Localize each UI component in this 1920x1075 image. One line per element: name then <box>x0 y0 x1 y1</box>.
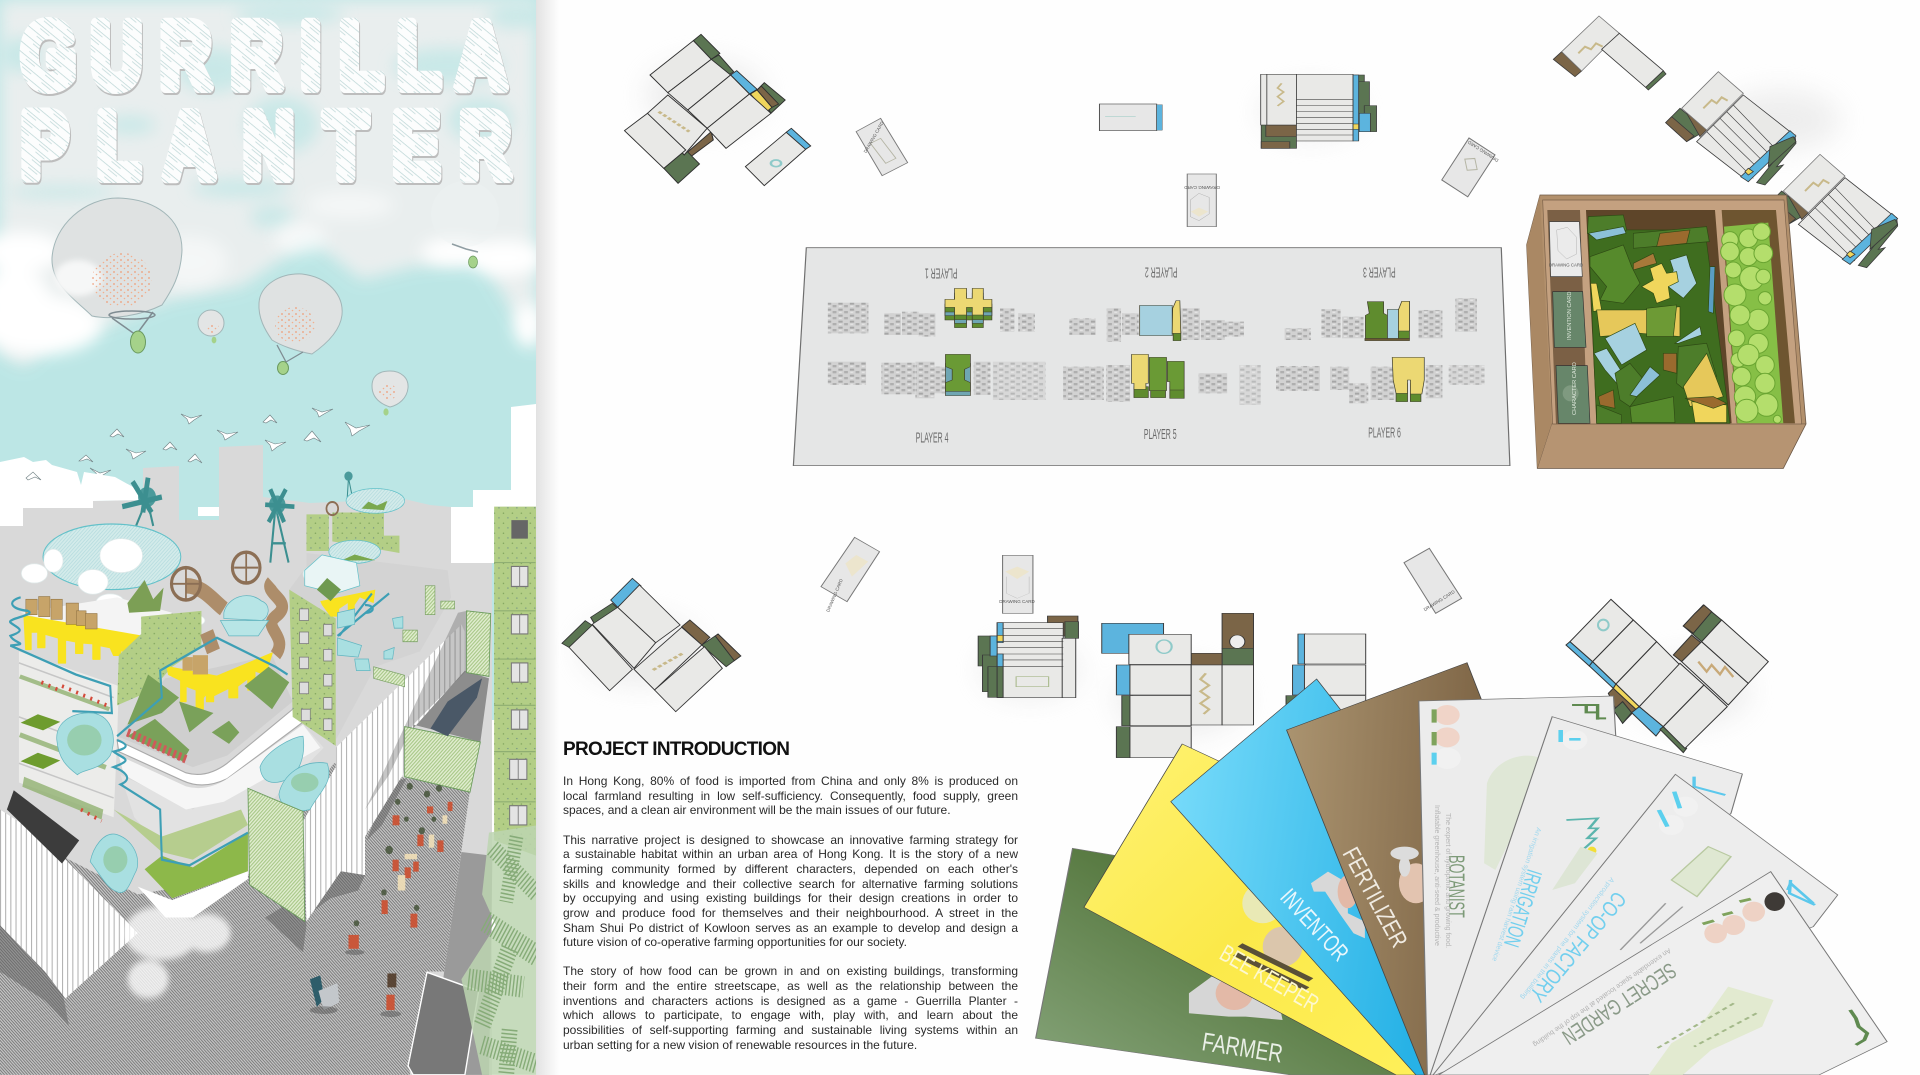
vertical card <box>1404 548 1462 613</box>
card: vertical bottom-left <box>821 537 880 602</box>
street ground <box>0 763 470 1075</box>
cards: bottom-left group <box>562 578 741 712</box>
small labels on drawing cards: DRAWING CARD <box>825 577 844 613</box>
player piece 1 <box>945 288 992 328</box>
back cluster of buildings <box>306 512 455 688</box>
box shell <box>1527 195 1806 468</box>
card titles: BOTANIST <box>1444 855 1469 918</box>
card: botanist <box>1419 696 1616 1075</box>
tabs <box>562 578 741 667</box>
heading: PROJECT INTRODUCTION <box>563 739 789 760</box>
storage box <box>1527 195 1806 468</box>
card titles: FERTILIZER <box>1337 842 1413 952</box>
coins <box>1721 223 1783 423</box>
boxed cards: DRAWING CARD <box>1549 263 1583 268</box>
paragraph three: possibilities of self-supporting farming and sustainable living systems within an <box>563 1023 1018 1037</box>
small labels on drawing cards: DRAWING CARD <box>1423 589 1456 612</box>
fan of character cards <box>1036 663 1887 1075</box>
board labels: PLAYER 3 <box>1363 264 1396 279</box>
card: farmer <box>1036 848 1422 1075</box>
clouds <box>0 0 544 367</box>
paragraph two: farming community formed by different characters, depended on each other's <box>563 862 1018 876</box>
paragraph three: their form and the entire streetscape, as well as the relationship between the <box>563 979 1018 993</box>
green mesh screens <box>248 611 491 921</box>
small labels on drawing cards <box>825 120 1499 613</box>
paragraph three: which allows to participate, to engage with, play with, and learn about the <box>563 1008 1018 1022</box>
card titles: CO-OP FACTORY <box>1524 886 1631 1006</box>
paragraph two: by occupying and using existing buildings for their design creations in order to <box>563 891 1018 905</box>
cards: top-right stack one <box>1666 72 1796 185</box>
paragraph two: skills and knowledge and their collective search for alternative farming solutions <box>563 877 1018 891</box>
card: inventor <box>1171 679 1450 1075</box>
cards: bottom-right group <box>1404 548 1768 753</box>
card titles: FARMER <box>1200 1027 1285 1068</box>
teal pipes <box>10 593 389 865</box>
paragraph two <box>563 833 1018 949</box>
board labels: PLAYER 1 <box>925 264 958 280</box>
balloon medium <box>259 274 342 374</box>
card descriptions: An extendable space located at the top of the building <box>1531 946 1672 1048</box>
white striped buildings <box>0 611 489 999</box>
card titles: IRRIGATION <box>1499 867 1547 950</box>
right green tower <box>289 555 375 746</box>
compartment: cards <box>1547 210 1587 424</box>
windmills <box>122 472 353 563</box>
cards: top-right L pair <box>1553 16 1666 90</box>
card: co-op factory <box>1433 774 1838 1075</box>
paragraph three <box>563 964 1018 1052</box>
card: secret garden <box>1439 872 1887 1075</box>
card tabs <box>664 34 811 183</box>
green wall middle <box>117 611 201 705</box>
paragraph two: Sham Shui Po district of Kowloon serves as an example to develop and design a <box>563 920 1018 934</box>
card: single top centre <box>1099 104 1162 131</box>
card descriptions: The expert of hydroponic and growing food. <box>1444 813 1451 948</box>
paragraph three: urban setting for a new vision of renewable resources in the future. <box>563 1038 917 1052</box>
card: vertical bottom-centre <box>1003 555 1033 613</box>
card titles: BEE KEEPER <box>1215 940 1323 1018</box>
card descriptions: A production system for the plants in the building <box>1519 876 1615 1000</box>
balloon faded <box>452 181 478 268</box>
brown slide and wheels <box>171 502 338 655</box>
faces <box>1570 599 1768 748</box>
left tower roof <box>21 580 172 663</box>
balloon right <box>372 371 408 416</box>
small labels on drawing cards: DRAWING CARD <box>1466 139 1499 163</box>
card: irrigation <box>1430 717 1742 1075</box>
market crowd <box>310 678 482 1017</box>
card: vertical top-right <box>1442 138 1495 197</box>
podium terrace <box>117 653 293 767</box>
water bubbles <box>57 596 403 893</box>
card titles <box>1200 842 1680 1068</box>
board sheet <box>793 248 1510 466</box>
panel shadow edge <box>536 0 560 1075</box>
compartment: pieces <box>1586 210 1732 423</box>
cards: top centre stack <box>1261 74 1377 148</box>
small labels on drawing cards: DRAWING CARD <box>863 120 885 154</box>
text block: project introduction <box>563 739 1018 1052</box>
cards: top-left group <box>624 34 811 186</box>
tabs <box>1566 605 1722 753</box>
player piece 5 <box>1132 354 1184 398</box>
card descriptions <box>1433 805 1672 1048</box>
card descriptions: An irrigation system using rain harvest device <box>1490 826 1542 962</box>
faces <box>569 585 722 712</box>
birds <box>79 408 370 479</box>
podium floors <box>114 709 324 918</box>
sky background <box>0 0 536 720</box>
board labels: PLAYER 6 <box>1368 426 1401 441</box>
player piece 4 <box>945 354 970 396</box>
grey shadow patches <box>0 779 406 1026</box>
left tower facade <box>7 651 119 864</box>
boxed cards <box>1549 222 1590 423</box>
paragraph three: inventions and characters actions is designed as a game - Guerrilla Planter - <box>563 994 1018 1008</box>
board labels: PLAYER 2 <box>1145 264 1178 279</box>
paragraph one <box>563 774 1018 817</box>
game pieces pile <box>1587 215 1730 423</box>
title <box>20 17 514 186</box>
card drawings <box>659 112 689 132</box>
boxed cards: CHARACTER CARD <box>1572 362 1578 415</box>
board labels: PLAYER 5 <box>1144 427 1177 443</box>
card: bee keeper <box>1084 744 1439 1075</box>
cards: top-right stack two <box>1767 154 1898 268</box>
card faces <box>624 41 806 186</box>
cards: bottom-centre cluster <box>1102 613 1254 758</box>
player piece 6 <box>1392 357 1424 402</box>
smoke clouds <box>21 538 308 625</box>
small labels on drawing cards: DRAWING CARD <box>1183 185 1220 190</box>
paragraph two: a sustainable habitat within an urban area of Hong Kong. It is the story of a new <box>563 847 1018 861</box>
card: vertical top centre <box>1187 174 1216 227</box>
player piece 2 <box>1140 301 1181 341</box>
player piece 3 <box>1365 301 1409 341</box>
paragraph one: spaces, and a clean air environment will be the main issues of our future. <box>563 803 951 817</box>
pavement right <box>408 852 492 1075</box>
panel: poster illustration <box>0 0 544 1075</box>
board labels <box>916 264 1401 446</box>
card titles: INVENTOR <box>1275 884 1353 967</box>
card: vertical top-left <box>856 118 908 176</box>
card: fertilizer <box>1287 663 1501 1075</box>
palms lower right <box>461 825 540 1075</box>
dome bubbles <box>43 489 405 590</box>
title: PLANTER <box>21 95 510 197</box>
paragraph two: grow and produce food for themselves and their neighbourhood. A street in the <box>563 906 1018 920</box>
balloon large <box>52 198 182 353</box>
paragraph one: In Hong Kong, 80% of food is imported from China and only 8% is produced on <box>563 774 1018 788</box>
paragraph one: local farmland resulting in low self-sufficiency. Consequently, food supply, green <box>563 789 1018 803</box>
card descriptions: Inflatable greenhouse, anti-seed & productive <box>1433 805 1440 946</box>
cards: bottom-centre stack <box>978 616 1078 698</box>
game board <box>793 248 1510 466</box>
compartment: coins <box>1722 210 1795 423</box>
cards: bottom-centre pair <box>1286 634 1366 726</box>
paragraph two: future vision of co-operative farming opportunities for our society. <box>563 935 907 949</box>
paragraph two: This narrative project is designed to showcase an innovative farming strategy for <box>563 833 1018 847</box>
skyline backdrop <box>0 404 536 1075</box>
floor plans <box>828 298 1485 405</box>
boxed cards: INVENTION CARD <box>1567 292 1573 340</box>
white haze at corner <box>124 906 231 999</box>
green tower right <box>494 507 536 856</box>
paragraph three: The story of how food can be grown in and on existing buildings, transforming <box>563 964 1018 978</box>
title: GURRILLA <box>21 5 506 107</box>
board labels: PLAYER 4 <box>916 431 949 446</box>
balloon small <box>198 310 224 343</box>
card titles: SECRET GARDEN <box>1557 957 1680 1049</box>
shadows under card groups <box>580 60 1840 735</box>
small labels on drawing cards: DRAWING CARD <box>999 599 1036 604</box>
